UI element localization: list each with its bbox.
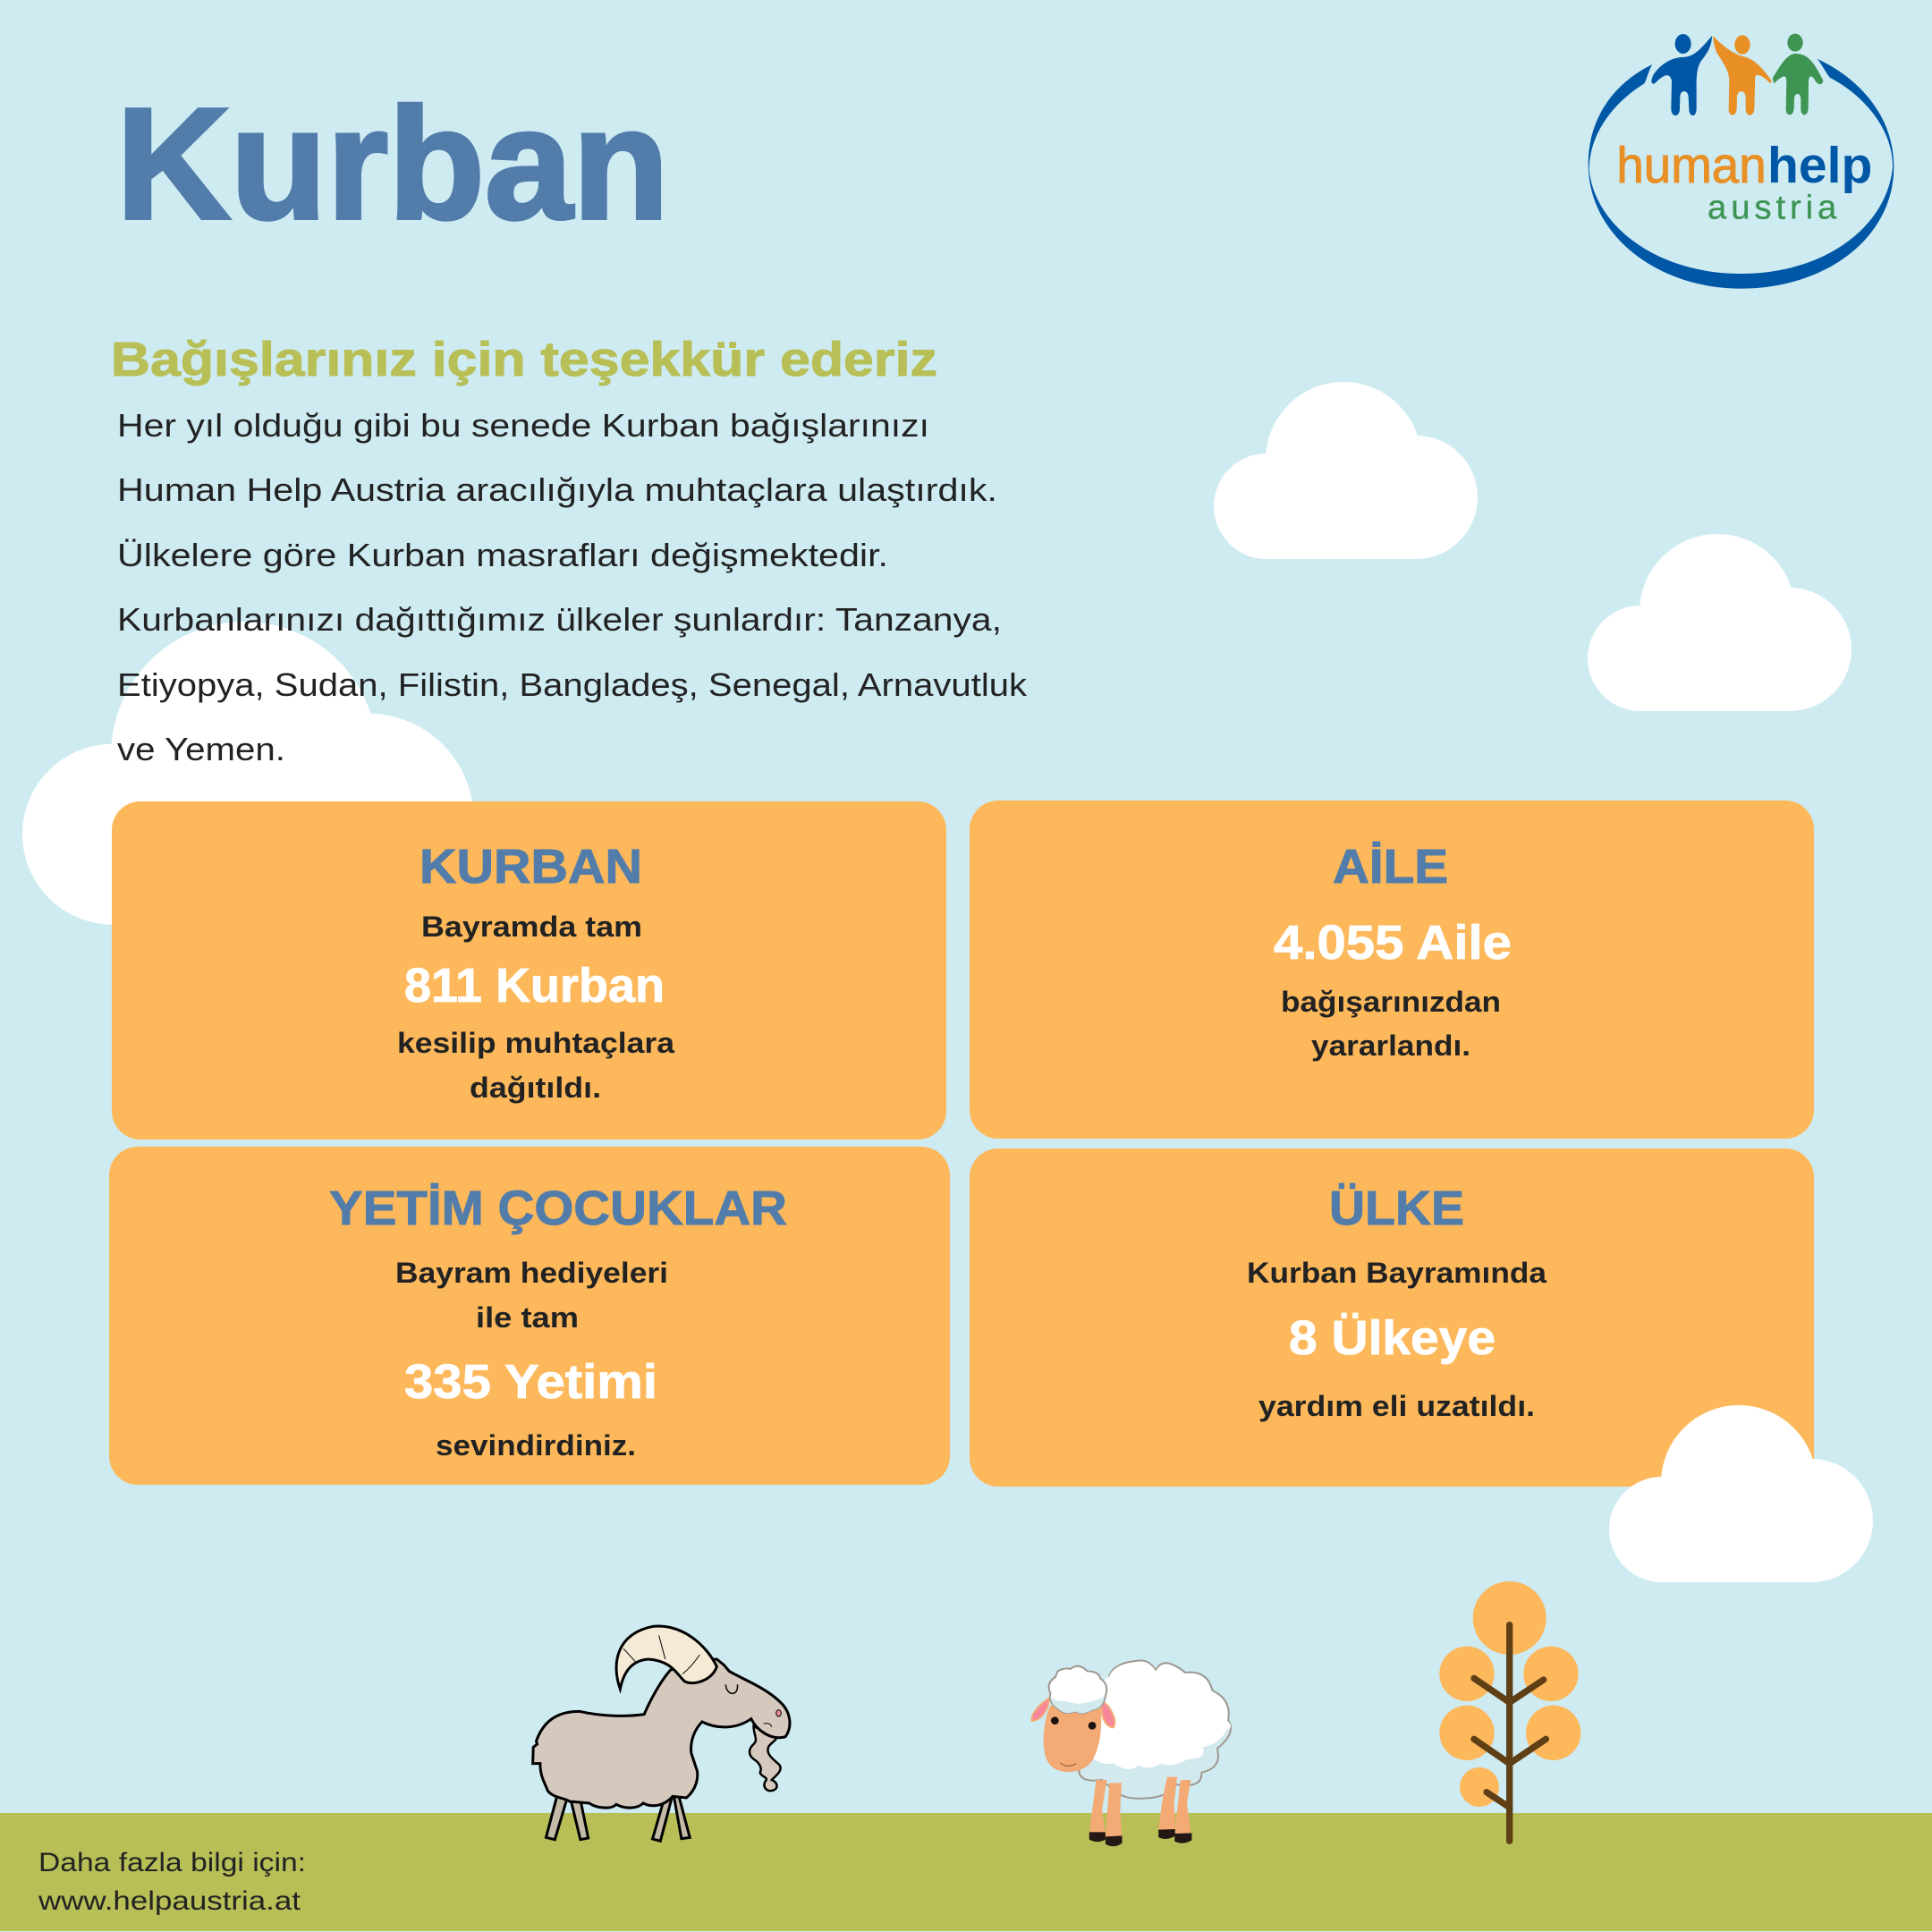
- panel: yetim cocuklar: sevindirdiniz.: [436, 1429, 636, 1462]
- illustration: goat: [533, 1626, 790, 1841]
- cloud: over bottom right panel: [1609, 1405, 1873, 1582]
- footer contact text: [38, 1848, 306, 1916]
- panel: ulke: Kurban Bayramında: [1247, 1257, 1546, 1289]
- footer contact text: www.helpaustria.at: [38, 1886, 301, 1916]
- sheep left ear: [1031, 1698, 1049, 1721]
- intro paragraph: ve Yemen.: [117, 731, 285, 767]
- sheep legs: [1089, 1777, 1191, 1838]
- sheep hooves: [1089, 1829, 1191, 1846]
- intro paragraph: Ülkelere göre Kurban masrafları değişmektedir.: [117, 537, 888, 573]
- cloud: upper right: [1588, 534, 1852, 711]
- tree foliage: [1439, 1581, 1580, 1807]
- logo: human help austria: [1589, 34, 1894, 289]
- sheep body wool lower: [1079, 1660, 1231, 1799]
- panel: aile: 4.055 Aile: [1274, 916, 1512, 970]
- panel: aile: bağışarınızdan: [1281, 986, 1501, 1018]
- panel: ulke: [970, 1148, 1814, 1487]
- logo word: austria: austria: [1707, 188, 1837, 226]
- panel: kurban: KURBAN: [419, 840, 642, 894]
- logo word: human: human: [1616, 138, 1767, 194]
- subheading: Bağışlarınız için teşekkür ederiz: [111, 333, 937, 386]
- intro paragraph: Kurbanlarınızı dağıttığımız ülkeler şunlardır: Tanzanya,: [117, 601, 1002, 638]
- logo figure: green: [1773, 34, 1823, 114]
- goat mouth: [764, 1724, 772, 1727]
- intro paragraph: [117, 407, 1028, 767]
- goat body: [533, 1659, 790, 1808]
- panel: ulke: ÜLKE: [1329, 1182, 1464, 1235]
- panel: kurban: 811 Kurban: [404, 959, 665, 1013]
- panel: ulke: 8 Ülkeye: [1289, 1311, 1496, 1365]
- cloud: left behind text: [22, 622, 473, 925]
- ground strip: [0, 1813, 1932, 1931]
- panel: yetim cocuklar: ile tam: [476, 1301, 579, 1334]
- cloud: upper middle: [1214, 382, 1478, 559]
- sheep right ear: [1102, 1701, 1114, 1727]
- goat legs: [546, 1795, 690, 1841]
- logo figure: blue: [1651, 34, 1712, 115]
- panel: aile: AİLE: [1333, 840, 1448, 894]
- panel: kurban: kesilip muhtaçlara: [397, 1027, 674, 1059]
- panel: ulke: yardım eli uzatıldı.: [1258, 1390, 1535, 1422]
- goat horn ridges: [623, 1635, 699, 1674]
- panel: aile: yararlandı.: [1311, 1030, 1470, 1062]
- sheep smile: [1060, 1763, 1076, 1766]
- logo word: help: help: [1767, 138, 1872, 194]
- panel: aile: [970, 801, 1814, 1139]
- panel: yetim cocuklar: 335 Yetimi: [404, 1355, 657, 1409]
- panel: kurban: dağıtıldı.: [470, 1072, 601, 1104]
- intro paragraph: Etiyopya, Sudan, Filistin, Bangladeş, Senegal, Arnavutluk: [117, 666, 1028, 703]
- illustration: sheep: [1031, 1660, 1231, 1846]
- panel: yetim cocuklar: YETİM ÇOCUKLAR: [329, 1182, 787, 1235]
- logo figure: orange: [1713, 35, 1772, 115]
- goat nostril: [776, 1710, 781, 1716]
- goat horn: [616, 1626, 716, 1689]
- sheep head: [1044, 1706, 1101, 1772]
- logo swoosh ring: [1589, 59, 1894, 289]
- panel: kurban: Bayramda tam: [421, 911, 642, 943]
- sheep left eye: [1051, 1716, 1059, 1724]
- panel: yetim cocuklar: Bayram hediyeleri: [395, 1257, 668, 1289]
- goat eye: [725, 1684, 738, 1693]
- tree trunk and branches: [1474, 1625, 1546, 1841]
- sheep right eye: [1089, 1722, 1096, 1730]
- footer contact text: Daha fazla bilgi için:: [38, 1848, 306, 1877]
- sheep cap shadow: [1050, 1696, 1105, 1713]
- panel: yetim cocuklar: [109, 1147, 950, 1485]
- panel: kurban: [112, 801, 946, 1140]
- intro paragraph: Her yıl olduğu gibi bu senede Kurban bağışlarınızı: [117, 407, 929, 444]
- sheep body wool upper: [1089, 1661, 1231, 1769]
- goat beard: [750, 1726, 781, 1791]
- intro paragraph: Human Help Austria aracılığıyla muhtaçlara ulaştırdık.: [117, 471, 997, 508]
- sheep wool cap: [1049, 1666, 1106, 1713]
- illustration: tree: [1439, 1581, 1580, 1841]
- title: Kurban: [116, 75, 669, 252]
